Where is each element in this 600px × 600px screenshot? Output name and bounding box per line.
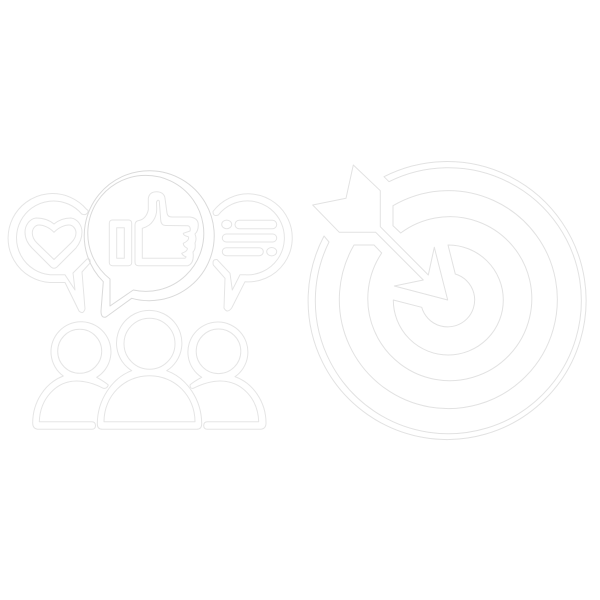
body inner [104,376,195,422]
target bullseye ring [393,245,503,355]
bubble outline outer [84,171,214,317]
thumb cuff [109,220,132,266]
bubble outline inner [88,175,204,306]
head inner [124,318,175,369]
icon: target with arrow [308,162,586,440]
text line 2 [222,234,277,242]
text line 1 [235,220,277,229]
body and head outline [97,310,202,429]
speech bubble: heart [8,194,90,313]
text line 3 [222,248,263,256]
body and head outline [33,322,111,429]
speech bubble: text lines [213,194,292,311]
icon: audience with speech bubbles [8,171,292,429]
body and head outline [188,322,266,429]
person: centre [97,310,202,429]
person: left [33,322,111,429]
icon: heart [25,218,82,268]
text line dot 2 [267,248,277,256]
bubble outline left [8,194,90,313]
speech bubble: thumbs up [84,171,214,317]
head inner [196,329,241,374]
arrow [313,165,448,300]
head inner [58,329,102,373]
icon: thumbs up [109,192,198,266]
target middle ring [339,191,557,409]
target outer ring [308,162,586,440]
bubble outline right [213,194,292,311]
hand outline [135,192,198,266]
person: right [188,322,266,429]
text line dot 1 [222,220,232,229]
